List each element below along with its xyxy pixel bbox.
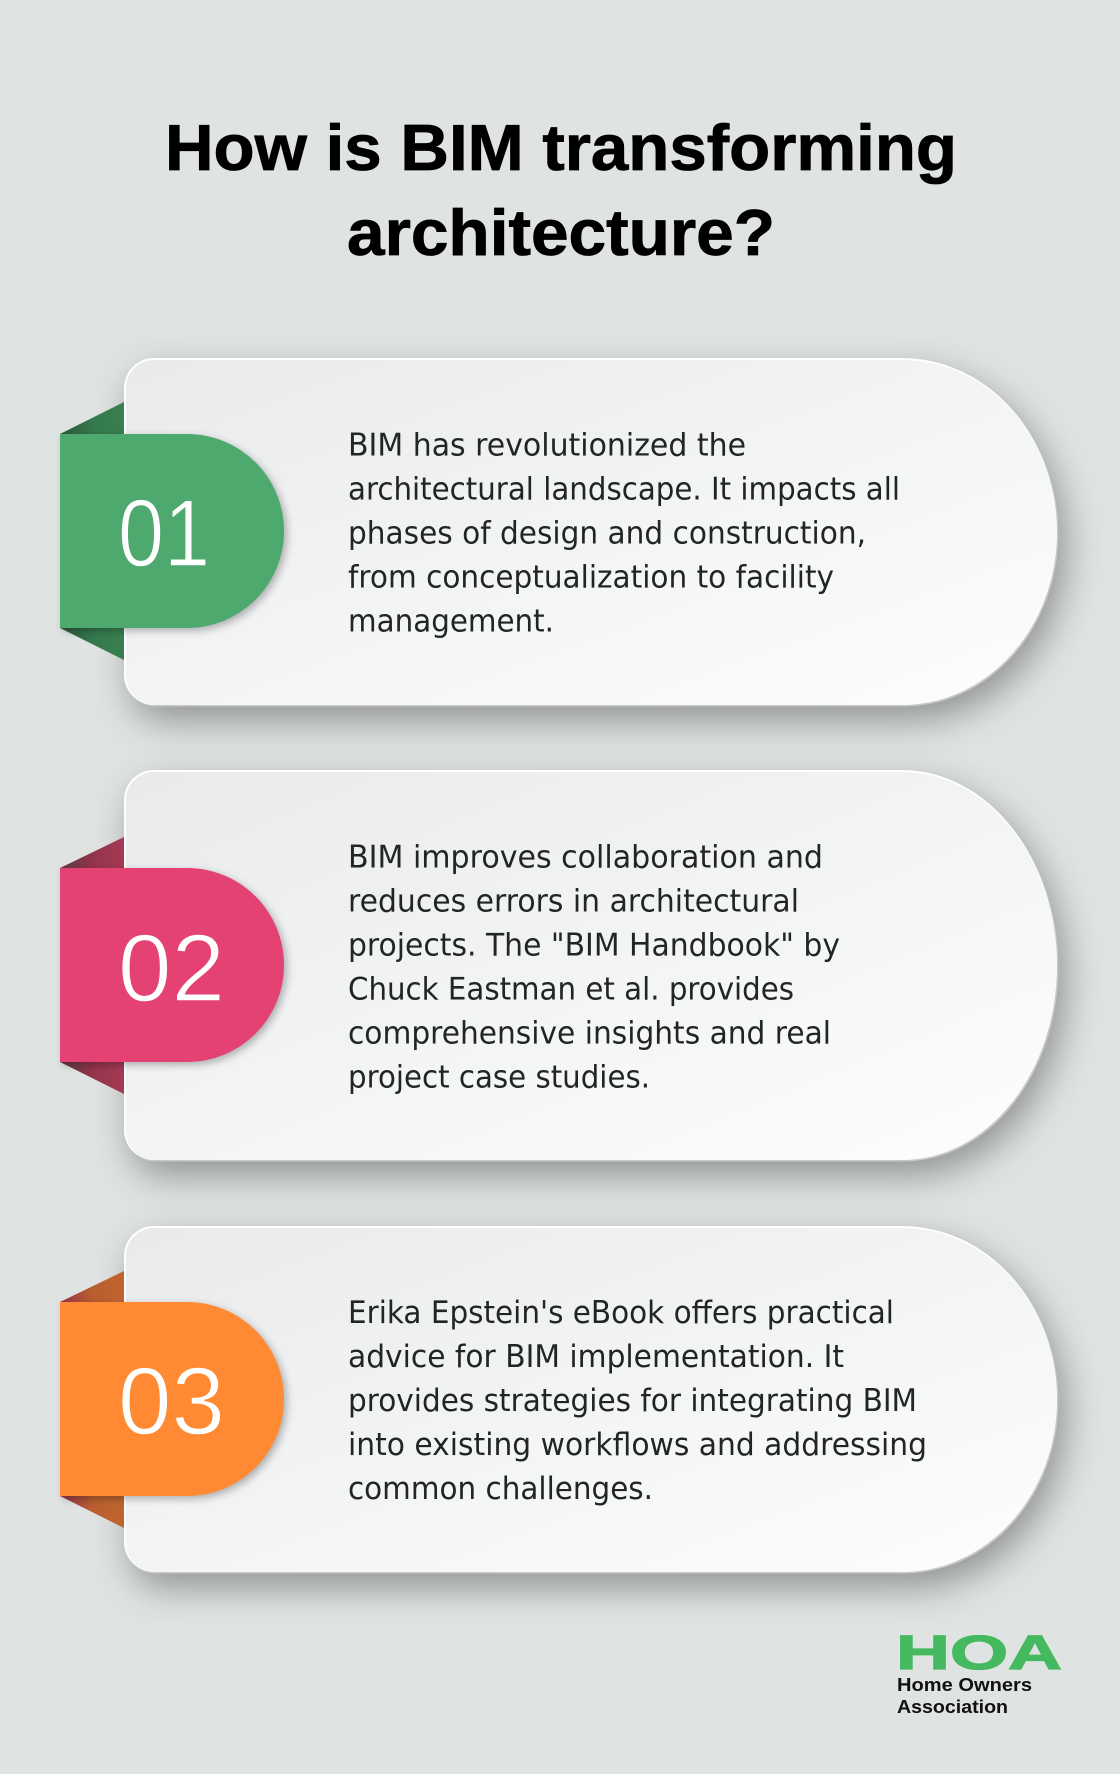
text 01: BIM has revolutionized the (348, 428, 746, 464)
text 02: project case studies. (348, 1060, 650, 1096)
text 01 (348, 428, 900, 640)
title: architecture? (347, 196, 775, 269)
text 03: provides strategies for integrating BIM (348, 1383, 917, 1419)
badge 02 (60, 868, 287, 1065)
text 02 (348, 840, 840, 1096)
text 03: Erika Epstein's eBook offers practical (348, 1295, 894, 1331)
logo: HOA Home Owners Association: Association (897, 1697, 1008, 1717)
text 01: architectural landscape. It impacts all (348, 472, 900, 508)
text 03: into existing workflows and addressing (348, 1427, 927, 1463)
text 02: BIM improves collaboration and (348, 840, 823, 876)
panel: step 02 (60, 770, 1065, 1175)
ribbon folds 03 (60, 1271, 124, 1528)
text 03: advice for BIM implementation. It (348, 1339, 844, 1375)
badge 01: 01 (118, 480, 210, 587)
badge 01 (60, 434, 287, 631)
text 02: projects. The "BIM Handbook" by (348, 928, 840, 964)
logo: HOA Home Owners Association: HOA (896, 1627, 1062, 1680)
panel: step 01 (60, 358, 1065, 720)
text 02: reduces errors in architectural (348, 884, 799, 920)
text 02: comprehensive insights and real (348, 1016, 831, 1052)
title: How is BIM transforming (165, 111, 957, 184)
badge 02: 02 (118, 915, 225, 1022)
badge 03: 03 (118, 1348, 225, 1455)
logo: HOA Home Owners Association: Home Owners (897, 1675, 1032, 1695)
ribbon folds 01 (60, 402, 124, 660)
text 01: phases of design and construction, (348, 516, 866, 552)
text 03 (348, 1295, 927, 1507)
title (165, 111, 957, 269)
panel: step 03 (60, 1226, 1065, 1587)
text 01: from conceptualization to facility (348, 560, 834, 596)
text 01: management. (348, 604, 554, 640)
text 02: Chuck Eastman et al. provides (348, 972, 794, 1008)
logo: HOA Home Owners Association (896, 1627, 1062, 1717)
ribbon folds 02 (60, 837, 124, 1094)
badge 03 (60, 1302, 287, 1499)
text 03: common challenges. (348, 1471, 653, 1507)
